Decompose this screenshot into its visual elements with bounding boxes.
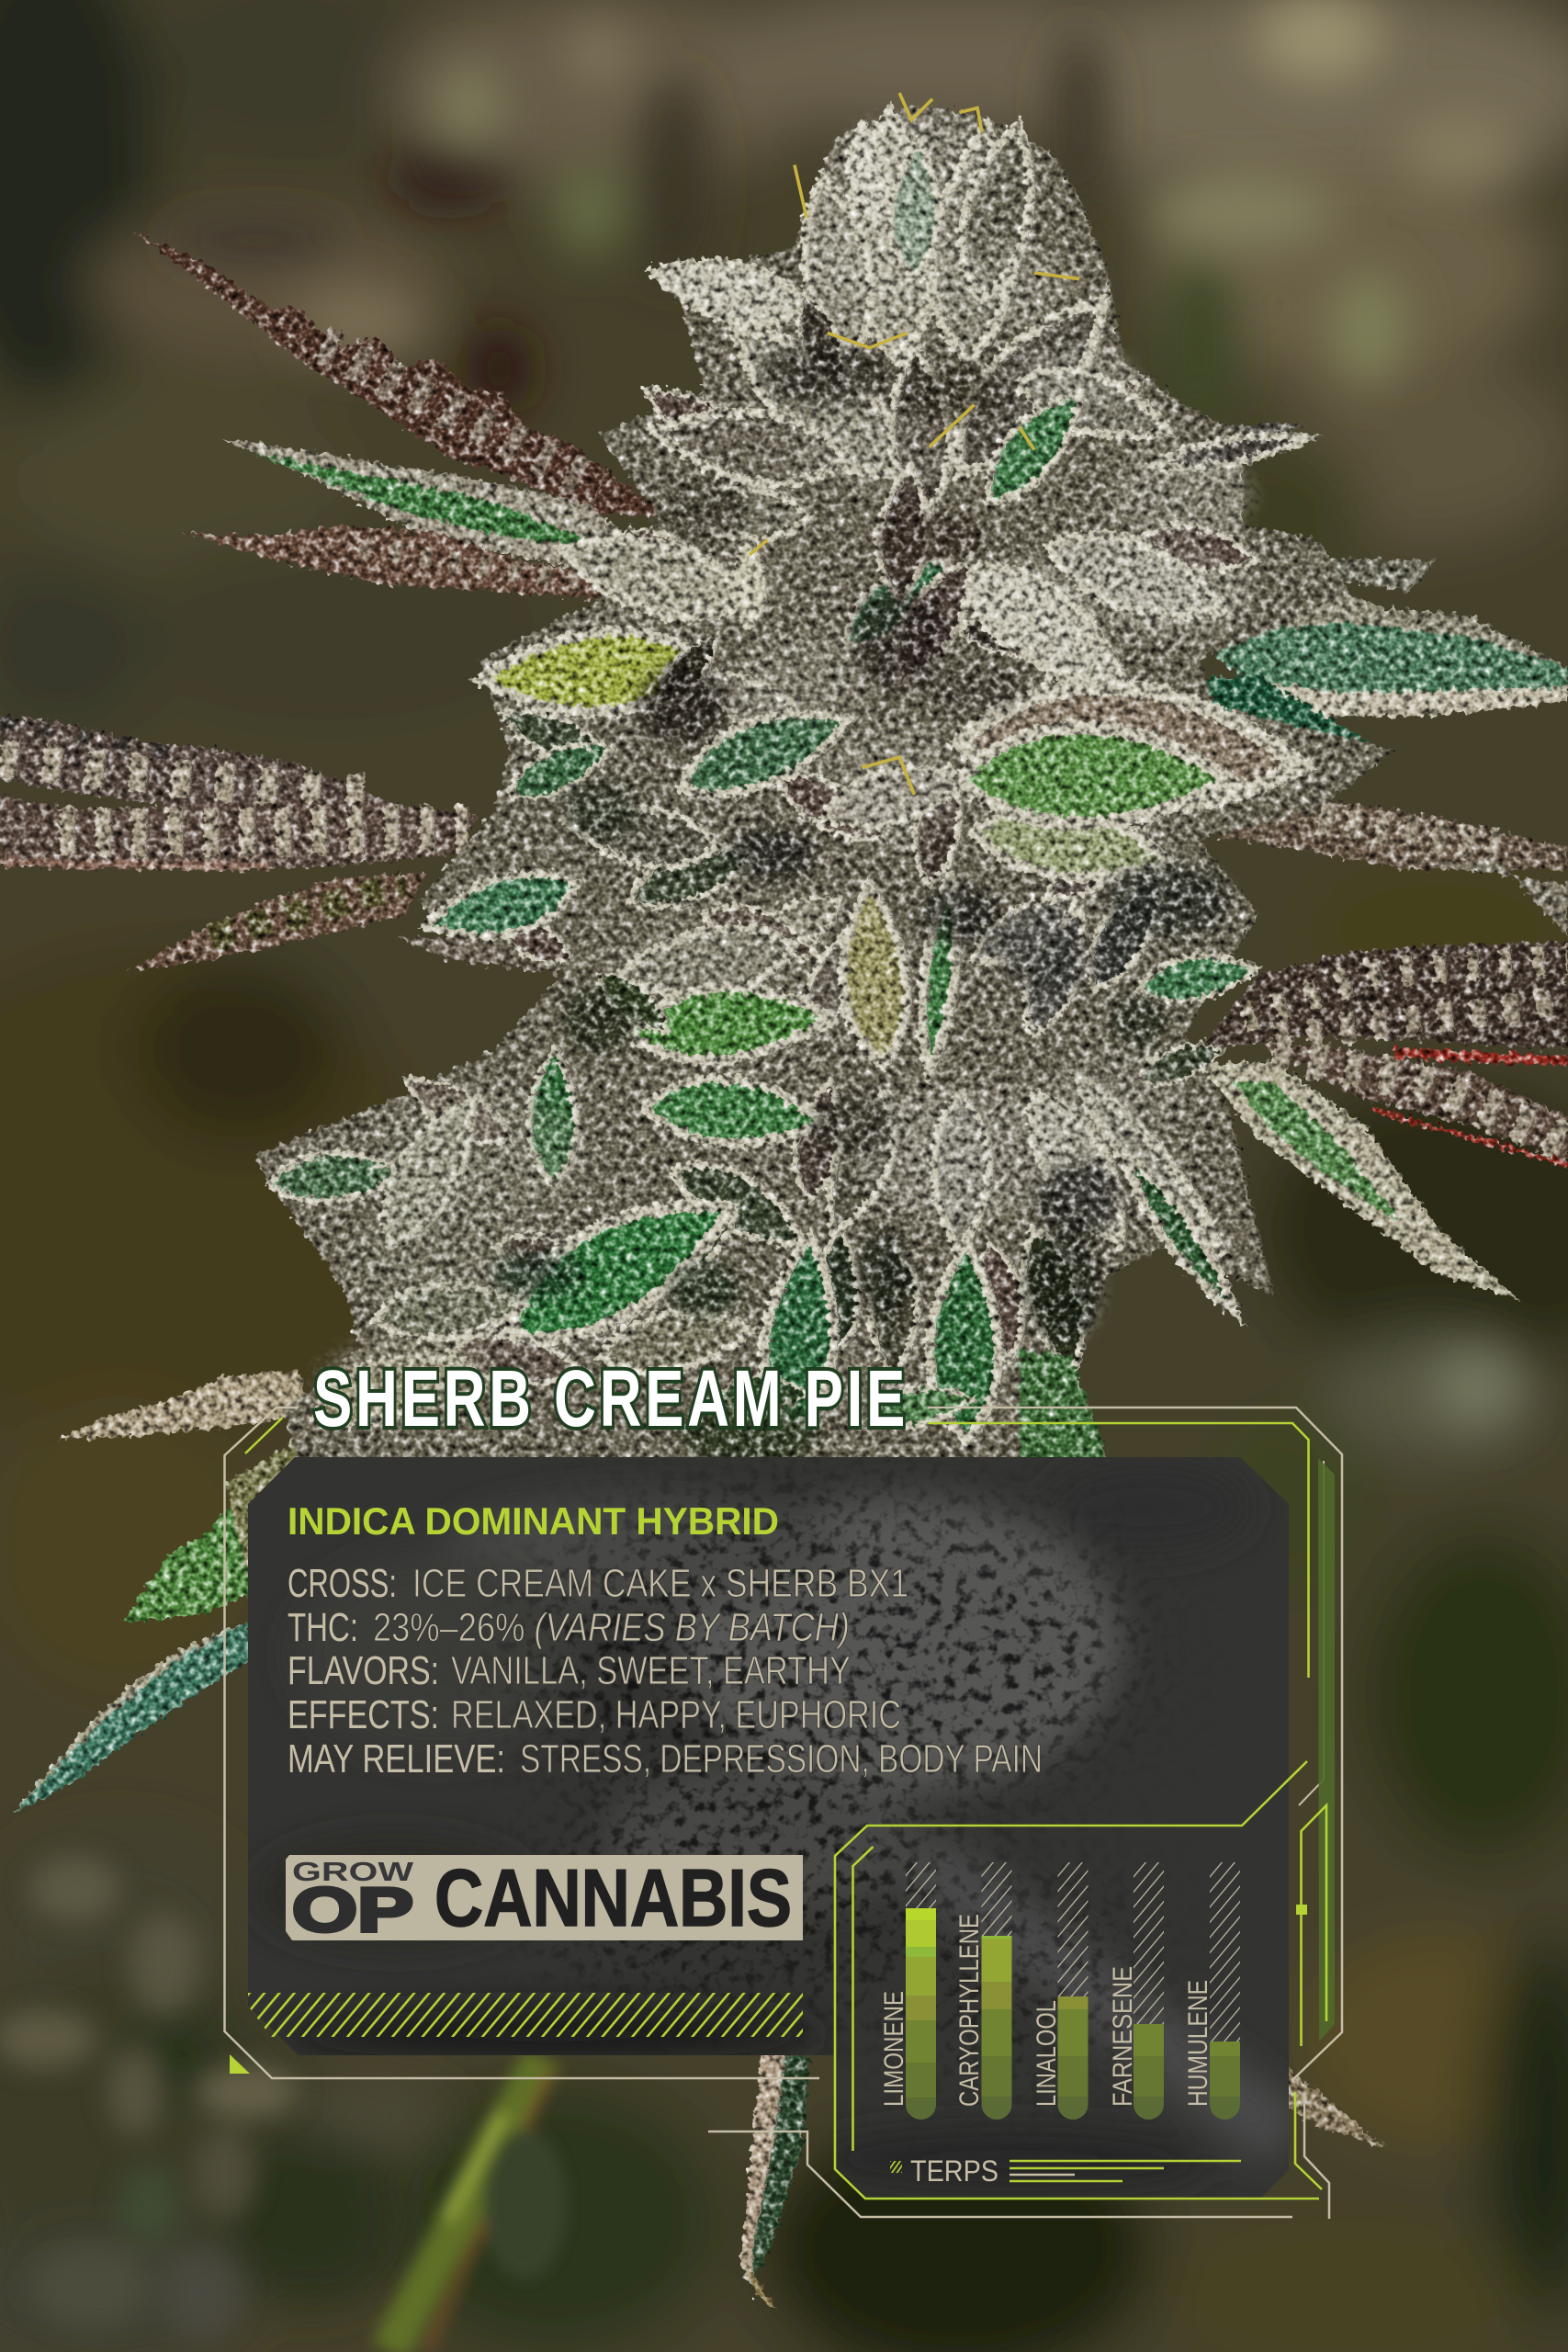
strain details text block: EFFECTS: bbox=[288, 1693, 439, 1737]
accent square marker bbox=[1296, 1905, 1307, 1915]
bar: farnesene bbox=[1134, 2024, 1164, 2120]
bar labels: HUMULENE bbox=[1183, 1980, 1213, 2107]
bar: limonene bbox=[906, 1908, 936, 2120]
strain details text block: FLAVORS: bbox=[288, 1649, 439, 1693]
lower hanging leaf bbox=[740, 2054, 809, 2309]
speckled frost texture bbox=[499, 1472, 1150, 2078]
accent green frame lines bbox=[245, 1418, 1326, 2199]
bar labels: LIMONENE bbox=[879, 1991, 909, 2107]
chart: terpene bars bbox=[879, 1862, 1240, 2120]
stem bbox=[389, 2057, 567, 2351]
pale frost highlights bbox=[315, 112, 1259, 1424]
strain details text block: MAY RELIEVE: bbox=[288, 1737, 505, 1781]
dark shadow pockets bbox=[495, 345, 1232, 1468]
far left horizontal leaves bbox=[0, 717, 600, 975]
logo: Grow Op Cannabis: OP bbox=[292, 1875, 413, 1945]
strain details text block: CROSS: bbox=[288, 1562, 397, 1606]
lower bracts bbox=[267, 1049, 1248, 1441]
panel: translucent dark info panel bbox=[239, 1452, 1295, 2205]
dark lower-left bud bbox=[0, 1829, 450, 2352]
bar labels: FARNESENE bbox=[1108, 1966, 1138, 2107]
translucent green side strip bbox=[1318, 1458, 1335, 2041]
fourth tier bracts bbox=[478, 545, 990, 876]
bar: caryophyllene bbox=[981, 1936, 1012, 2120]
underlying bracts filling gaps bbox=[394, 365, 1261, 1395]
brown upper-left sugar leaf bbox=[135, 232, 667, 517]
middle bracts bbox=[419, 860, 1260, 1151]
right leaf tip under frame bbox=[1259, 2054, 1387, 2149]
logo: Grow Op Cannabis bbox=[286, 1852, 803, 1945]
bar labels: LINALOOL bbox=[1032, 2000, 1062, 2107]
third tier bracts bbox=[552, 376, 1237, 713]
mottled bud texture, lower left bbox=[0, 1856, 299, 2339]
second tier bracts bbox=[649, 272, 1312, 513]
green leaf right of title bbox=[1020, 1350, 1110, 1462]
title: SHERB CREAM PIE bbox=[313, 1354, 908, 1443]
logo: Grow Op Cannabis: GROW bbox=[292, 1858, 414, 1887]
crown bracts bbox=[645, 111, 1048, 363]
strain details text block: STRESS, DEPRESSION, BODY PAIN bbox=[520, 1737, 1043, 1781]
left lower leaves bbox=[12, 1372, 360, 1815]
bar labels bbox=[879, 1914, 1213, 2107]
bar hatch tracks bbox=[906, 1862, 1240, 2041]
logo: Grow Op Cannabis: CANNABIS bbox=[434, 1852, 792, 1943]
strain details text block: RELAXED, HAPPY, EUPHORIC bbox=[451, 1693, 901, 1737]
monochrome bud ghost inside panel bbox=[257, 1461, 1286, 2191]
terps legend: TERPS bbox=[910, 2154, 998, 2188]
bar: humulene bbox=[1210, 2041, 1240, 2120]
bar: linalool bbox=[1058, 1996, 1088, 2120]
right side leaves bbox=[1139, 423, 1568, 1302]
strain type heading: INDICA DOMINANT HYBRID bbox=[288, 1499, 779, 1543]
brown left leaf bbox=[180, 525, 629, 600]
strain details text block: ICE CREAM CAKE x SHERB BX1 bbox=[412, 1562, 908, 1606]
corner triangle bbox=[230, 2054, 250, 2074]
yellow pistil hairs bbox=[750, 93, 1079, 795]
green upper-left leaf bbox=[222, 438, 660, 577]
strain details text block: THC: bbox=[288, 1606, 358, 1650]
hatched accent band bbox=[248, 1993, 803, 2037]
strain details text block: VANILLA, SWEET, EARTHY bbox=[451, 1649, 851, 1693]
outer frame lines bbox=[224, 1408, 1342, 2219]
bar labels: CARYOPHYLLENE bbox=[954, 1914, 985, 2107]
terps legend bbox=[890, 2154, 1241, 2188]
strain details text block: 23%–26% (VARIES BY BATCH) bbox=[373, 1606, 850, 1650]
big green fan bract bbox=[955, 676, 1308, 890]
main cola flower mass bbox=[254, 105, 1394, 1469]
bokeh highlights bbox=[165, 0, 1521, 1426]
strain details text block bbox=[288, 1562, 1043, 1781]
